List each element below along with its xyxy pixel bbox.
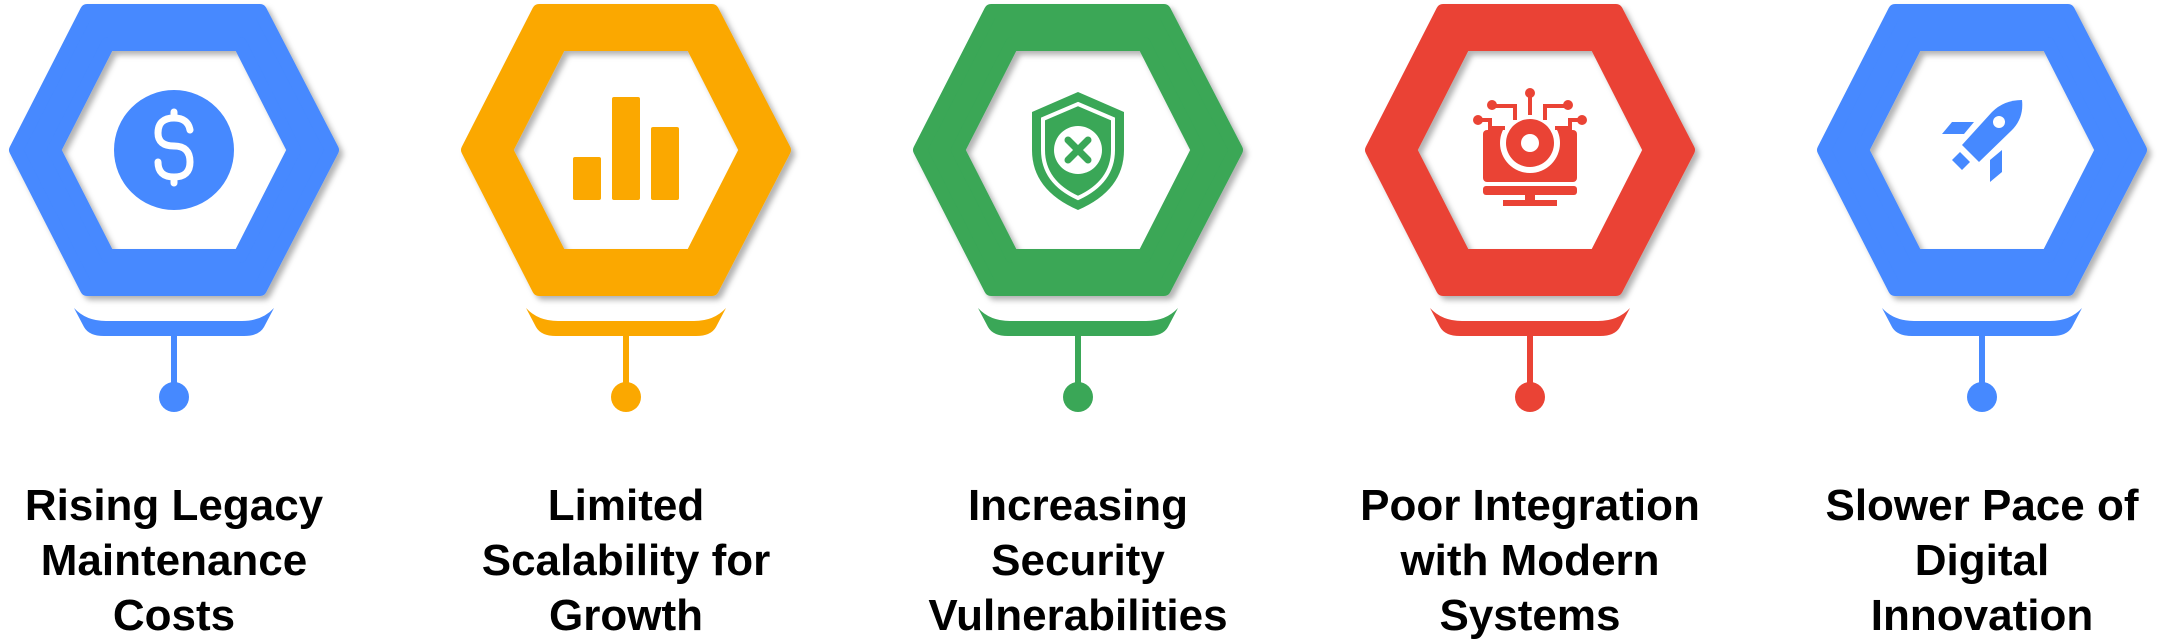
label 4: Poor Integration xyxy=(1360,481,1700,530)
item 5: innovation hexagon xyxy=(1824,11,2140,412)
icon: dollar xyxy=(114,90,234,210)
label 5: Digital xyxy=(1915,536,2049,585)
label 2 xyxy=(482,481,770,640)
item 4: integration hexagon xyxy=(1372,11,1688,412)
label 3: Increasing xyxy=(968,481,1188,530)
item 2: scalability hexagon xyxy=(468,11,784,412)
label 5: Slower Pace of xyxy=(1825,481,2138,530)
label 5 xyxy=(1825,481,2139,640)
label 3: Security xyxy=(991,536,1165,585)
icon: bar chart xyxy=(573,97,679,200)
label 3: Vulnerabilities xyxy=(928,591,1228,640)
icon: shield with x xyxy=(1032,92,1124,210)
label 4 xyxy=(1360,481,1700,640)
label 1: Maintenance xyxy=(41,536,307,585)
label 4: with Modern xyxy=(1400,536,1660,585)
item 1: legacy costs hexagon xyxy=(16,11,332,412)
label 5: Innovation xyxy=(1871,591,2093,640)
label 1: Rising Legacy xyxy=(25,481,323,530)
label 1: Costs xyxy=(113,591,235,640)
icon: monitor with gear xyxy=(1473,88,1587,206)
label 3 xyxy=(928,481,1228,640)
icon: rocket xyxy=(1942,100,2022,182)
label 2: Growth xyxy=(549,591,703,640)
label 4: Systems xyxy=(1439,591,1620,640)
item 3: security hexagon xyxy=(920,11,1236,412)
label 2: Scalability for xyxy=(482,536,770,585)
label 1 xyxy=(25,481,323,640)
label 2: Limited xyxy=(548,481,704,530)
